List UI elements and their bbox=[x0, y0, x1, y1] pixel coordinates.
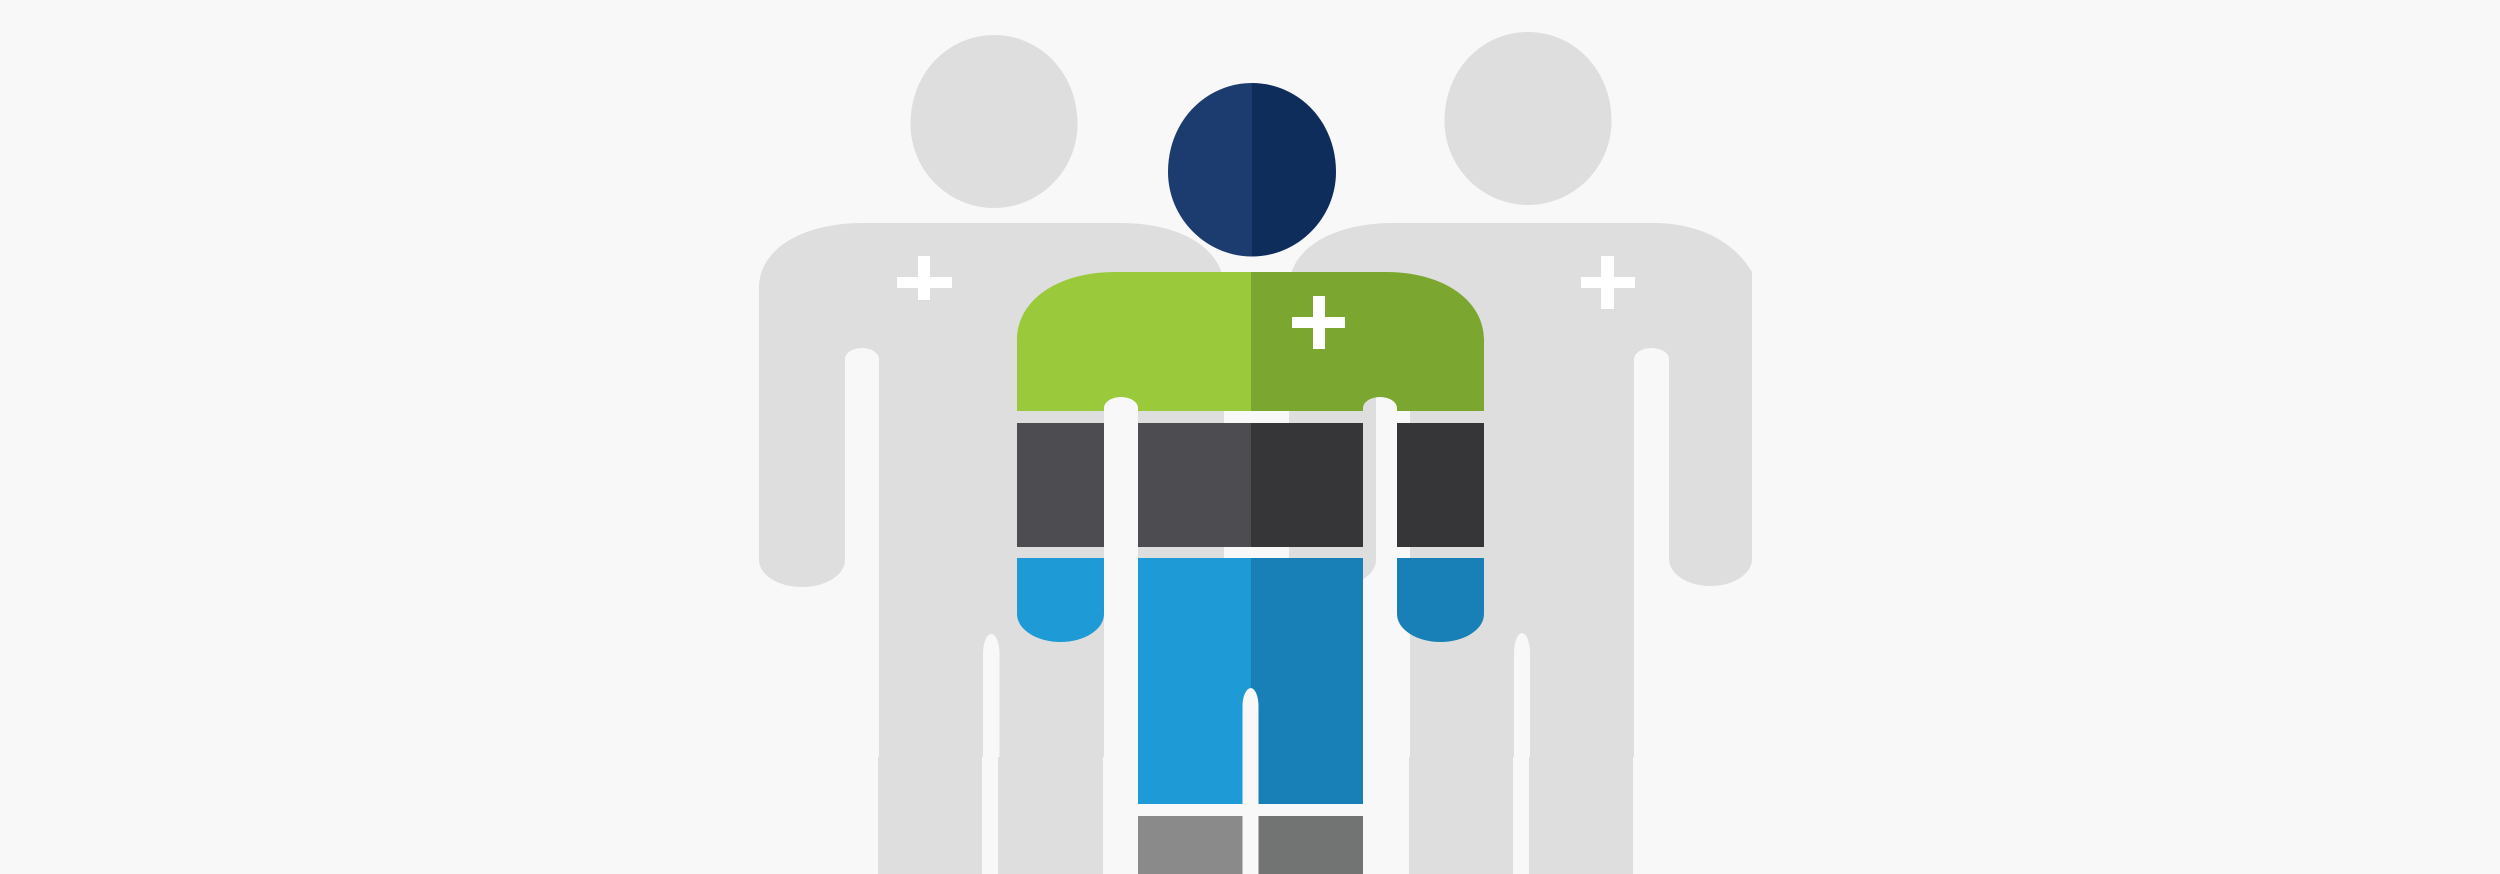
body: left person bbox=[759, 223, 1224, 874]
head: central person bbox=[1168, 83, 1336, 256]
sleeve: right blue cuff bbox=[1397, 558, 1484, 642]
figure: right background person bbox=[1289, 32, 1752, 874]
body: right person bbox=[1289, 223, 1752, 874]
shirt: dark band bbox=[1017, 423, 1484, 547]
icon: left person plus bbox=[897, 256, 952, 300]
trousers: blue legs bbox=[1138, 558, 1363, 804]
sleeve: left blue cuff bbox=[1017, 558, 1104, 642]
figure: left background person bbox=[759, 35, 1224, 874]
head: right person bbox=[1444, 32, 1612, 205]
shirt: green shoulders bbox=[1017, 272, 1484, 411]
head: left person bbox=[910, 35, 1078, 208]
icon: right person plus bbox=[1581, 256, 1635, 309]
figure: central coloured person bbox=[1017, 83, 1484, 874]
icon: central person plus bbox=[1292, 296, 1345, 349]
shoes: grey blocks bbox=[1138, 816, 1363, 874]
